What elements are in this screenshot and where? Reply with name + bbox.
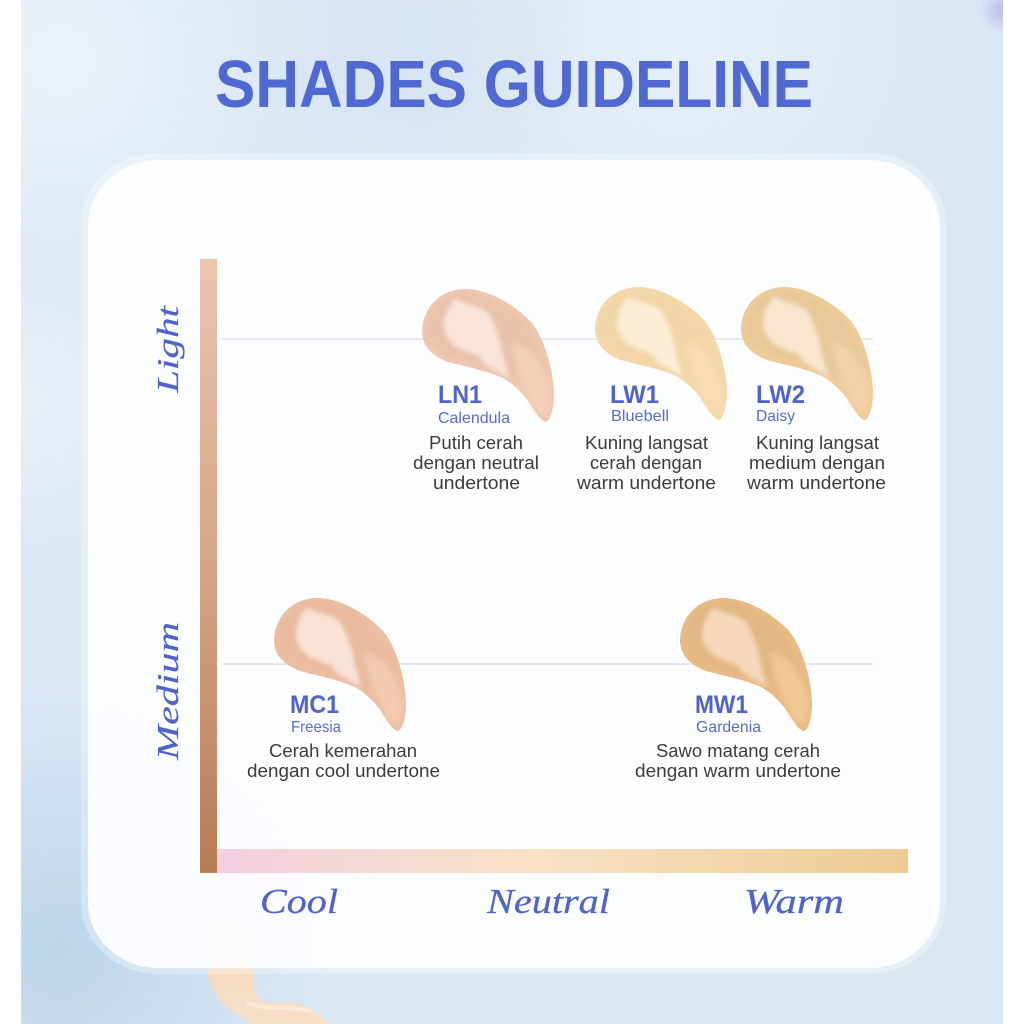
shade info: LN1: undertone [433,473,520,493]
shade info: MW1 [635,691,841,781]
shade info: LW2: Daisy [756,408,795,425]
shade info: LN1: Calendula [438,410,510,427]
axis label: Light: Light [150,304,185,394]
axis label: Neutral: Neutral [486,882,610,921]
swatch: LW2 [741,287,873,420]
axis label: Medium: Medium [150,622,185,761]
horizontal axis bar [217,849,908,873]
decorative foundation squiggle [204,918,328,1024]
shade info: LW2: Kuning langsat [756,433,879,453]
shade info: LW1: Kuning langsat [585,433,708,453]
axis label: Warm: Warm [744,882,844,921]
shade info: MW1: dengan warm undertone [635,761,841,781]
swatch: LN1 [422,289,554,422]
shade info: MC1: Freesia [291,719,341,736]
shade info: MW1: Sawo matang cerah [656,741,820,761]
swatch: MC1 [274,598,406,731]
shade info: MC1: MC1 [290,691,339,719]
shade info: LW1: cerah dengan [590,453,702,473]
shade info: LW2: medium dengan [749,453,885,473]
shade info: MW1: MW1 [695,691,748,719]
grid line: medium [222,663,873,665]
shade info: LW1 [576,381,716,493]
axis label: Cool: Cool [260,882,338,921]
shade info: LW2: LW2 [756,381,805,409]
grid line: light [222,338,873,340]
shade info: MW1: Gardenia [696,719,761,736]
vertical axis bar [200,259,217,873]
shade info: LW2: warm undertone [746,473,886,493]
shade info: LN1: dengan neutral [413,453,539,473]
shade info: MC1 [247,691,440,781]
shade info: LW2 [746,381,886,493]
shade info: LN1: LN1 [438,381,482,409]
shade info: LW1: warm undertone [576,473,716,493]
shade info: LW1: Bluebell [611,408,669,425]
shade info: LN1: Putih cerah [429,433,523,453]
swatch: LW1 [595,287,727,420]
shade info: LN1 [413,381,539,493]
panel: shade chart card [81,153,946,974]
shade info: MC1: dengan cool undertone [247,761,440,781]
shade info: MC1: Cerah kemerahan [269,741,417,761]
swatch: MW1 [680,598,812,731]
shade info: LW1: LW1 [610,381,659,409]
title: SHADES GUIDELINE [215,47,813,122]
